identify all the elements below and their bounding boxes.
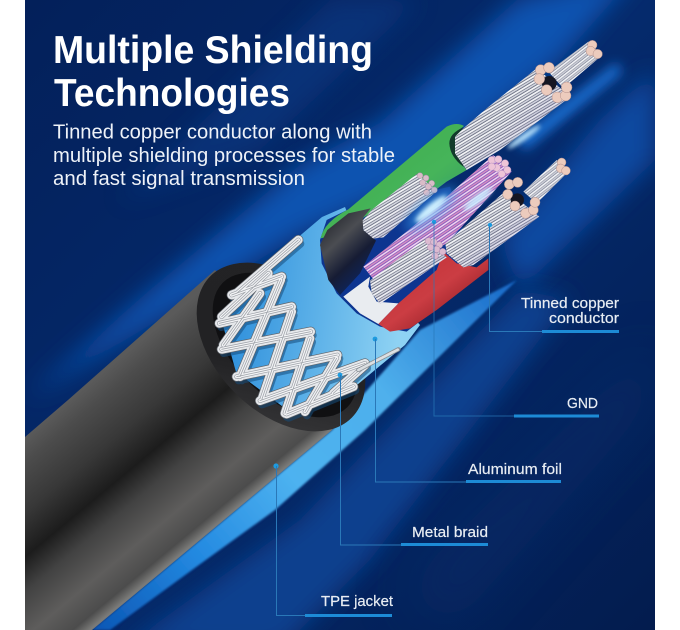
description text: Tinned copper conductor along with (53, 120, 372, 144)
callout: aluminum foil: Aluminum foil (468, 461, 562, 478)
green wire end opening (449, 128, 464, 166)
callout: tinned copper conductor: conductor (549, 310, 619, 327)
white wire strands (370, 238, 447, 304)
callout: tinned copper conductor: Tinned copper (521, 295, 619, 312)
red wire sheath (378, 252, 488, 332)
callout: GND (432, 220, 599, 418)
wire bundle (320, 40, 602, 332)
aluminum foil (222, 207, 420, 412)
red wire strands (445, 177, 540, 267)
title: Technologies (54, 72, 290, 115)
red wire thin strand tip (523, 158, 570, 203)
callout: TPE jacket: TPE jacket (321, 593, 394, 610)
description text (53, 120, 395, 190)
description text: and fast signal transmission (53, 167, 305, 190)
cable opening interior (320, 187, 467, 332)
metal braid (219, 240, 398, 418)
blue light glows among wires (400, 123, 542, 237)
title (53, 29, 373, 115)
green wire strands (455, 62, 572, 170)
TPE jacket (25, 270, 345, 630)
callout: metal braid (338, 373, 488, 546)
purple wire strands (363, 155, 512, 283)
callout: TPE jacket (273, 463, 394, 617)
black wire sheath (320, 208, 376, 295)
light blue glow band under cable (92, 280, 517, 630)
callout: metal braid: Metal braid (412, 524, 488, 541)
callout: GND: GND (567, 395, 598, 412)
white wire sheath (343, 277, 398, 324)
callout: tinned copper conductor (488, 223, 619, 333)
jacket end collar (196, 262, 366, 432)
description text: multiple shielding processes for stable (53, 144, 395, 167)
black wire strands (363, 173, 437, 239)
callout: aluminum foil (373, 337, 562, 483)
title: Multiple Shielding (53, 29, 373, 72)
green wire sheath (321, 124, 467, 238)
green wire thin strand tip (548, 40, 602, 88)
